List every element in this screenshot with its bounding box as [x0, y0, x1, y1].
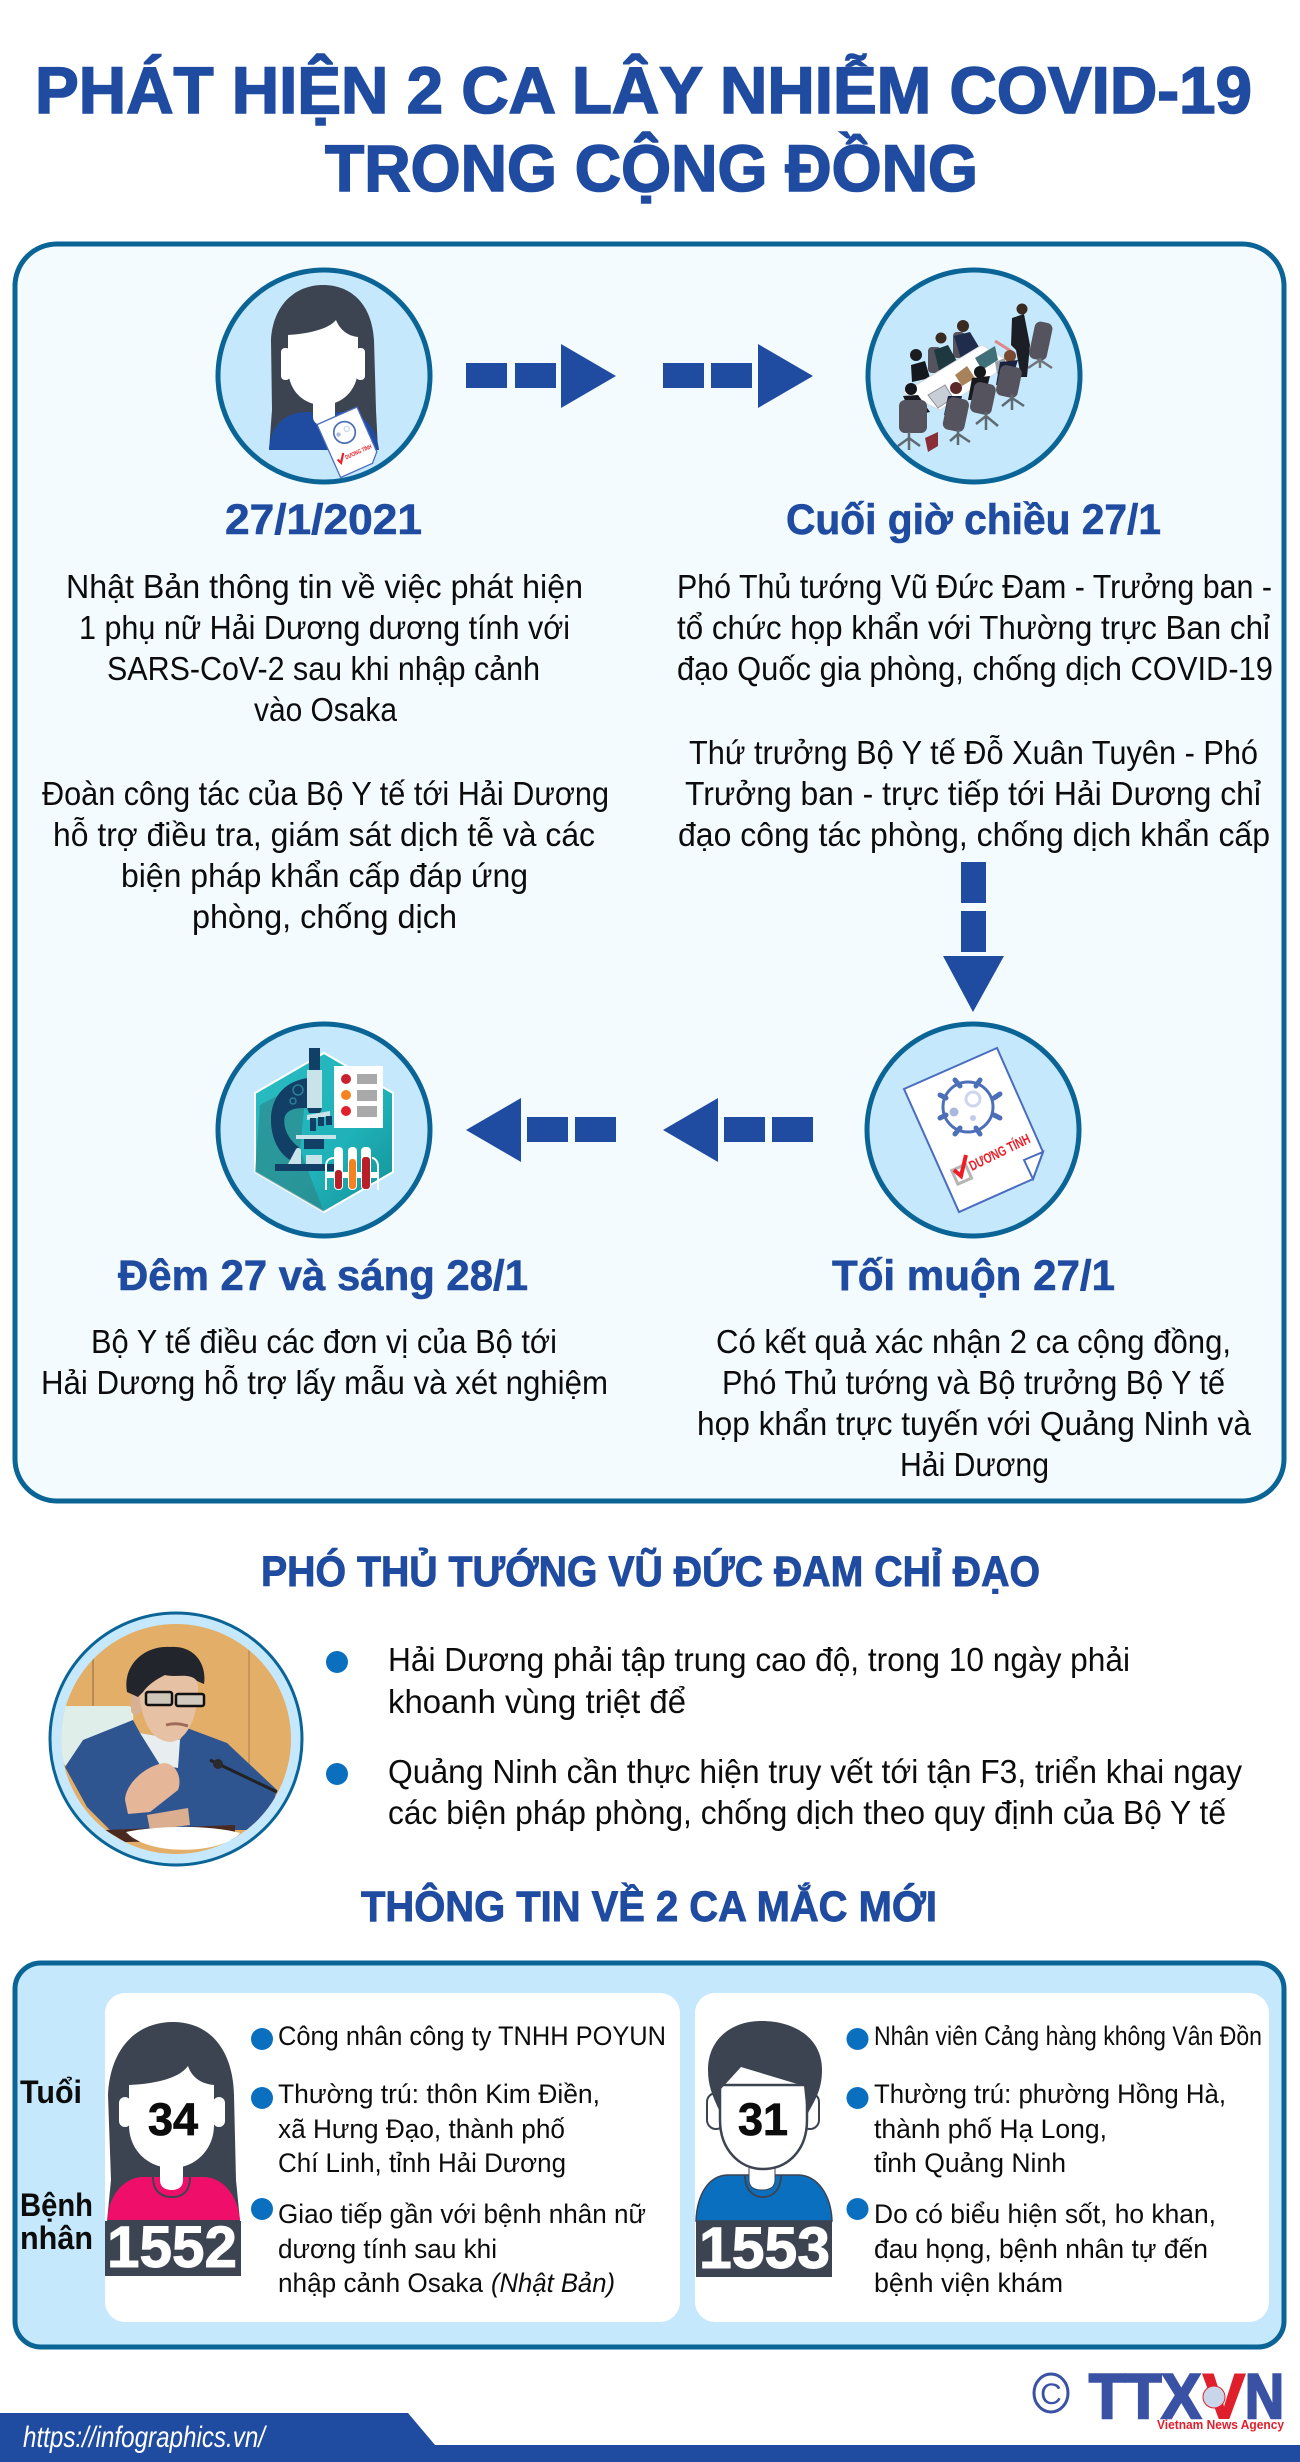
heading: 27/1/2021: 27/1/2021: [225, 496, 422, 544]
figure: male patient: 31: [738, 2094, 788, 2145]
figure: female patient: 34: [148, 2094, 198, 2145]
title: [35, 53, 1252, 205]
figure: male patient: [696, 2021, 832, 2281]
logo: TTXVN: [1034, 2362, 1285, 2432]
text: step 3: Phó Thủ tướng và Bộ trưởng Bộ Y tế: [722, 1364, 1225, 1401]
fact: symptoms: đau họng, bệnh nhân tự đến: [874, 2234, 1208, 2264]
fact: residence: Chí Linh, tỉnh Hải Dương: [278, 2148, 566, 2178]
icon: woman with positive test: DƯƠNG TÍNH: [344, 442, 373, 461]
heading: Thông tin về 2 ca mắc mới: THÔNG TIN VỀ 2 CA MẮC MỚI: [361, 1882, 937, 1931]
fact: contact: dương tính sau khi: [278, 2234, 497, 2264]
arrow: left 2: [663, 1098, 813, 1162]
icon: microscope and test tubes: [218, 1024, 430, 1236]
arrow: down: [943, 862, 1004, 1012]
fact: contact: nhập cảnh Osaka: [278, 2268, 484, 2298]
text: step 2: đạo công tác phòng, chống dịch khẩn cấp: [678, 816, 1270, 853]
text: step 1: [42, 568, 609, 935]
logo: TTXVN: Vietnam News Agency: [1157, 2417, 1285, 2432]
icon: positive test document: [867, 1024, 1079, 1236]
text: directive 2: [388, 1753, 1242, 1831]
text: step 4: Hải Dương hỗ trợ lấy mẫu và xét nghiệm: [41, 1364, 608, 1401]
arrow: right 1: [466, 344, 616, 408]
fact: residence: [251, 2079, 600, 2178]
label: Bệnh nhân: Bệnh: [20, 2187, 93, 2223]
text: directive 2: Quảng Ninh cần thực hiện truy vết tới tận F3, triển khai ngay: [388, 1753, 1242, 1790]
text: step 2: [677, 568, 1273, 853]
text: step 2: đạo Quốc gia phòng, chống dịch COVID-19: [677, 650, 1273, 687]
footer band: https://infographics.vn/: [23, 2421, 267, 2454]
card: patient 1553: [695, 1993, 1269, 2322]
text: step 1: hỗ trợ điều tra, giám sát dịch tễ và các: [53, 816, 595, 853]
fact: residence: Thường trú: phường Hồng Hà,: [874, 2079, 1226, 2109]
fact: residence: thành phố Hạ Long,: [874, 2114, 1107, 2144]
text: step 1: Đoàn công tác của Bộ Y tế tới Hải Dương: [42, 775, 609, 812]
fact: symptoms: Do có biểu hiện sốt, ho khan,: [874, 2199, 1216, 2229]
fact: contact: (Nhật Bản): [491, 2268, 615, 2298]
icon: woman with positive test: [218, 270, 430, 482]
fact: symptoms: [846, 2198, 1216, 2298]
panel: new cases: [15, 1963, 1284, 2347]
text: step 3: Hải Dương: [900, 1446, 1049, 1483]
text: step 1: 1 phụ nữ Hải Dương dương tính với: [79, 609, 570, 646]
logo: TTXVN: V: [1203, 2362, 1245, 2432]
text: step 1: phòng, chống dịch: [192, 898, 457, 935]
fact: contact: Giao tiếp gần với bệnh nhân nữ: [278, 2199, 646, 2229]
text: step 3: [697, 1323, 1252, 1483]
panel: timeline: [15, 244, 1284, 1501]
text: step 3: Có kết quả xác nhận 2 ca cộng đồng,: [716, 1323, 1231, 1360]
heading: Phó Thủ tướng chỉ đạo: PHÓ THỦ TƯỚNG VŨ ĐỨC ĐAM CHỈ ĐẠO: [261, 1547, 1040, 1596]
figure: male patient: 1553: [699, 2216, 830, 2281]
text: step 1: Nhật Bản thông tin về việc phát hiện: [66, 568, 583, 605]
text: step 1: SARS-CoV-2 sau khi nhập cảnh: [107, 650, 540, 687]
heading: Tối muộn 27/1: Tối muộn 27/1: [832, 1252, 1115, 1300]
fact: residence: [846, 2079, 1226, 2178]
fact: occupation: Công nhân công ty TNHH POYUN: [278, 2021, 666, 2051]
text: step 4: Bộ Y tế điều các đơn vị của Bộ tới: [91, 1323, 557, 1360]
text: step 1: biện pháp khẩn cấp đáp ứng: [121, 857, 528, 894]
text: step 2: Trưởng ban - trực tiếp tới Hải Dương chỉ: [685, 775, 1262, 812]
title: PHÁT HIỆN 2 CA LÂY NHIỄM COVID-19: [35, 53, 1252, 127]
footer band: [0, 2413, 1300, 2462]
text: directive 1: [388, 1641, 1130, 1720]
label: Bệnh nhân: [20, 2187, 93, 2256]
logo: TTXVN: N: [1245, 2362, 1284, 2432]
card: patient 1552: [105, 1993, 680, 2322]
bullet: [326, 1651, 348, 1673]
arrow: left 1: [466, 1098, 616, 1162]
heading: Đêm 27 và sáng 28/1: Đêm 27 và sáng 28/1: [118, 1252, 528, 1300]
icon: positive test document: DƯƠNG TÍNH: [966, 1130, 1033, 1174]
text: step 2: tổ chức họp khẩn với Thường trực Ban chỉ: [677, 609, 1271, 646]
text: step 1: vào Osaka: [254, 691, 398, 728]
label: Tuổi: Tuổi: [20, 2074, 82, 2110]
text: directive 1: Hải Dương phải tập trung cao độ, trong 10 ngày phải: [388, 1641, 1130, 1678]
fact: residence: Thường trú: thôn Kim Điền,: [278, 2079, 600, 2109]
photo: Deputy Prime Minister: [50, 1613, 302, 1865]
title: TRONG CỘNG ĐỒNG: [325, 131, 978, 205]
heading: Cuối giờ chiều 27/1: Cuối giờ chiều 27/1: [786, 496, 1161, 544]
bullet: [326, 1763, 348, 1785]
logo: TTXVN: C: [1040, 2378, 1062, 2411]
figure: female patient: [105, 2022, 241, 2280]
figure: female patient: 1552: [107, 2215, 237, 2280]
icon: meeting: [868, 270, 1080, 482]
text: step 3: họp khẩn trực tuyến với Quảng Ninh và: [697, 1405, 1252, 1442]
arrow: right 2: [663, 344, 813, 408]
text: step 4: [41, 1323, 608, 1401]
fact: contact: [251, 2198, 646, 2298]
label: Bệnh nhân: nhân: [20, 2220, 93, 2256]
fact: residence: xã Hưng Đạo, thành phố: [278, 2114, 565, 2144]
fact: residence: tỉnh Quảng Ninh: [874, 2148, 1066, 2178]
text: step 2: Thứ trưởng Bộ Y tế Đỗ Xuân Tuyên - Phó: [689, 734, 1258, 771]
text: directive 2: các biện pháp phòng, chống dịch theo quy định của Bộ Y tế: [388, 1794, 1226, 1831]
logo: TTXVN: TTX: [1089, 2362, 1201, 2432]
text: directive 1: khoanh vùng triệt để: [388, 1683, 686, 1720]
fact: symptoms: bệnh viện khám: [874, 2268, 1063, 2298]
